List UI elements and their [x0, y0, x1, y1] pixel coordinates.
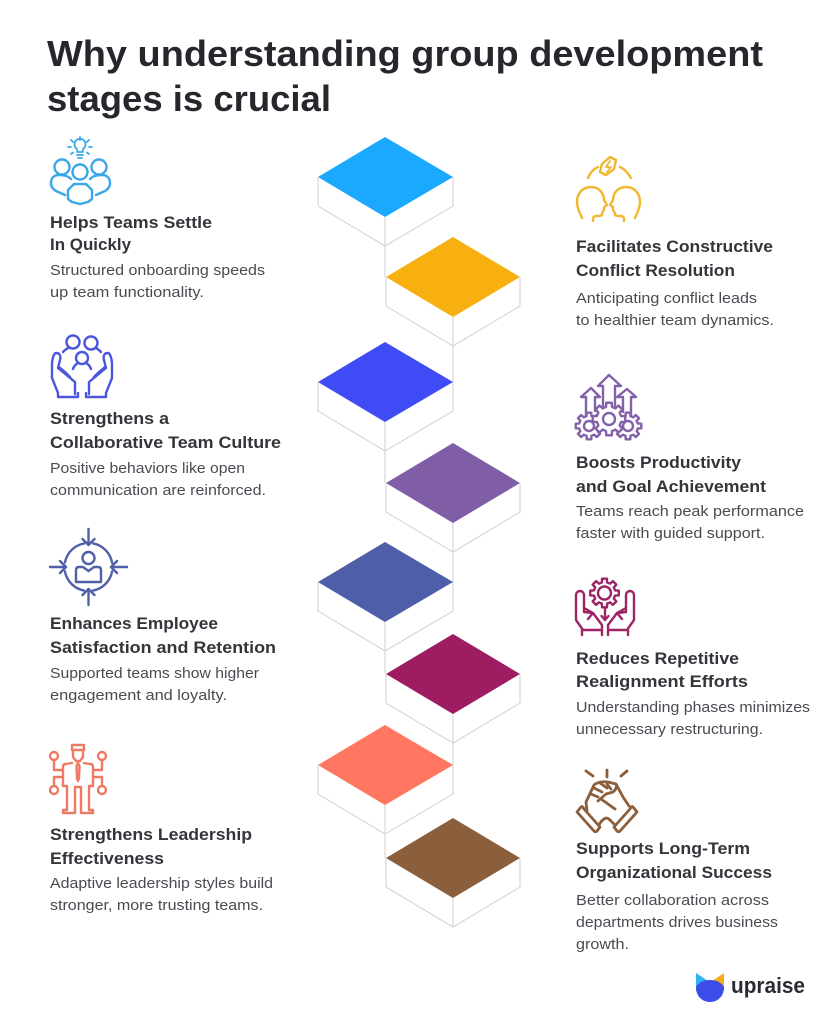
icon: two heads with spark [577, 157, 640, 221]
panel: facilitates constructive conflict resolution [576, 157, 774, 329]
icon: person in target with arrows [50, 529, 127, 605]
description: Structured onboarding speeds [50, 263, 265, 279]
panel: strengthens leadership effectiveness [50, 745, 273, 914]
panel: helps teams settle in quickly [50, 137, 265, 301]
heading: Supports Long-Term [576, 840, 750, 858]
description: to healthier team dynamics. [576, 313, 774, 329]
description: stronger, more trusting teams. [50, 898, 263, 914]
heading [576, 454, 767, 496]
heading: Conflict Resolution [576, 262, 735, 280]
panel: boosts productivity and goal achievement [576, 375, 804, 542]
isometric staircase of coloured blocks [318, 137, 520, 927]
heading: Effectiveness [50, 850, 164, 868]
heading: Satisfaction and Retention [50, 639, 276, 657]
description: up team functionality. [50, 285, 204, 301]
description [576, 893, 778, 953]
block 2: amber [386, 237, 520, 346]
description: Anticipating conflict leads [576, 291, 757, 307]
heading [576, 840, 772, 882]
description: Adaptive leadership styles build [50, 876, 273, 892]
description [50, 461, 266, 499]
block 7: coral [318, 725, 453, 834]
icon: team with light bulb [51, 137, 110, 204]
description: Better collaboration across [576, 893, 769, 909]
description [576, 291, 774, 329]
description: growth. [576, 937, 629, 953]
logo mark [696, 973, 724, 1002]
description: Teams reach peak performance [576, 504, 804, 520]
panel: enhances employee satisfaction and retention [50, 529, 276, 704]
heading [50, 826, 252, 868]
heading: Collaborative Team Culture [50, 434, 281, 452]
description: departments drives business [576, 915, 778, 931]
icon: gears with up arrows [576, 375, 641, 439]
heading: Strengthens a [50, 410, 170, 428]
description: engagement and loyalty. [50, 688, 227, 704]
heading [50, 615, 276, 657]
title: stages is crucial [47, 78, 331, 119]
heading [576, 238, 773, 280]
panel: reduces repetitive realignment efforts [576, 579, 810, 738]
heading [576, 650, 748, 691]
icon: networked leader [50, 745, 106, 813]
icon: hands holding people [52, 336, 112, 397]
heading: Boosts Productivity [576, 454, 742, 472]
block 3: blue [318, 342, 453, 451]
heading [50, 214, 212, 254]
heading: Realignment Efforts [576, 673, 748, 691]
block 1: cyan [318, 137, 453, 246]
block 8: brown [386, 818, 520, 927]
title [47, 33, 763, 119]
heading: Organizational Success [576, 864, 772, 882]
block 5: slate blue [318, 542, 453, 651]
block 4: purple [386, 443, 520, 552]
description: Understanding phases minimizes [576, 700, 810, 716]
block 6: magenta [386, 634, 520, 743]
description [50, 263, 265, 301]
heading: In Quickly [50, 236, 132, 254]
heading: Reduces Repetitive [576, 650, 739, 668]
icon: clasped hands [577, 770, 637, 832]
heading: Enhances Employee [50, 615, 218, 633]
heading: and Goal Achievement [576, 478, 767, 496]
heading [50, 410, 281, 452]
title: Why understanding group development [47, 33, 763, 74]
logo: upraise [696, 973, 805, 1002]
description [576, 700, 810, 738]
heading: Strengthens Leadership [50, 826, 252, 844]
wordmark: upraise [731, 973, 805, 998]
description [576, 504, 804, 542]
icon: hands holding gear [576, 579, 634, 635]
description: unnecessary restructuring. [576, 722, 763, 738]
panel: strengthens a collaborative team culture [50, 336, 281, 499]
panel: supports long-term organizational success [576, 770, 778, 953]
description: Positive behaviors like open [50, 461, 245, 477]
description [50, 666, 259, 704]
description: faster with guided support. [576, 526, 765, 542]
heading: Facilitates Constructive [576, 238, 773, 256]
heading: Helps Teams Settle [50, 214, 212, 232]
description: communication are reinforced. [50, 483, 266, 499]
description [50, 876, 273, 914]
description: Supported teams show higher [50, 666, 259, 682]
